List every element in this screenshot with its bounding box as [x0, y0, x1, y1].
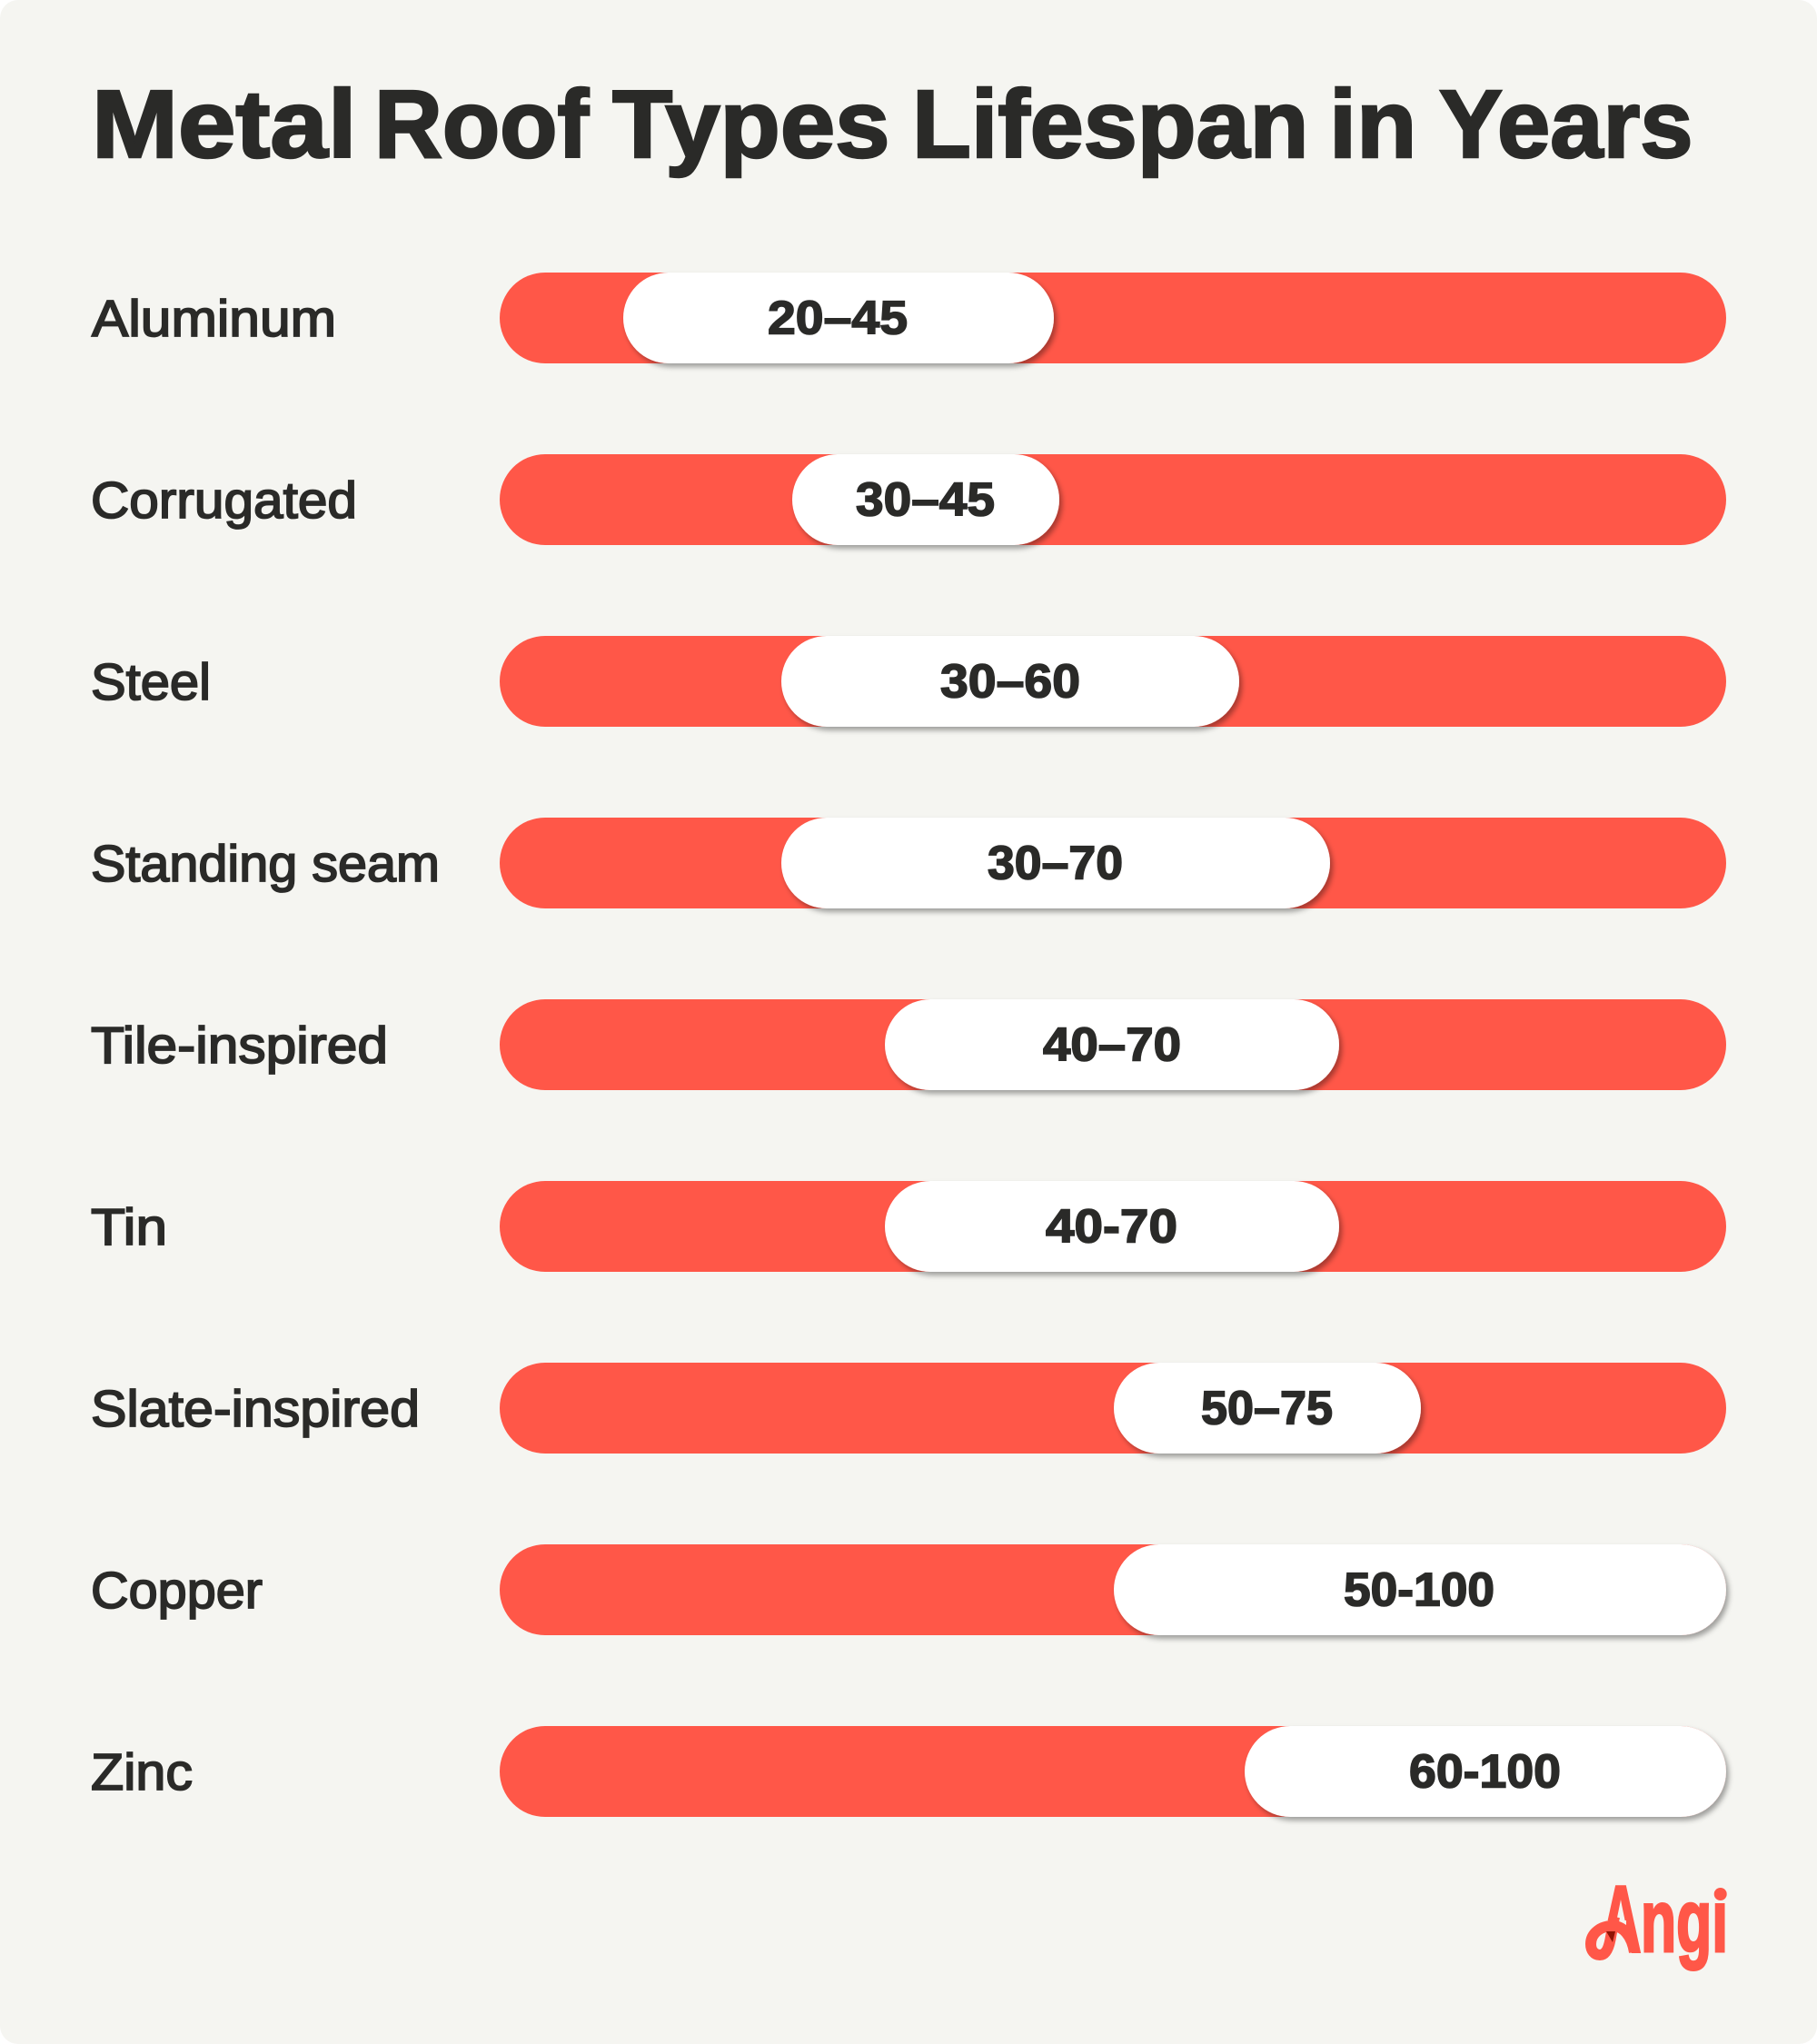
- track bar: Tile-inspired: [500, 999, 1726, 1090]
- track bar: Standing seam: [500, 818, 1726, 908]
- range pill: Corrugated: [792, 454, 1059, 545]
- range value: Zinc: 60-100: [1409, 1746, 1561, 1799]
- row: Standing seam: [91, 818, 1726, 908]
- label: Zinc: Zinc: [91, 1743, 193, 1801]
- track bar: Slate-inspired: [500, 1363, 1726, 1454]
- label: Tin: Tin: [91, 1198, 167, 1256]
- range pill: Zinc: [1245, 1726, 1726, 1817]
- title: [92, 71, 1693, 178]
- row: Copper: [91, 1544, 1726, 1635]
- track bar: Aluminum: [500, 273, 1726, 363]
- range value: Copper: 50-100: [1344, 1564, 1494, 1617]
- title: Roof: [374, 71, 590, 178]
- row: Slate-inspired: [91, 1363, 1726, 1454]
- range value: Aluminum: 20–45: [768, 293, 908, 345]
- track bar: Zinc: [500, 1726, 1726, 1817]
- range pill: Aluminum: [623, 273, 1054, 363]
- range value: Steel: 30–60: [940, 656, 1080, 709]
- label: Copper: Copper: [91, 1562, 263, 1620]
- range pill: Steel: [781, 636, 1239, 727]
- title: Metal: [92, 71, 356, 178]
- track bar: Corrugated: [500, 454, 1726, 545]
- track bar: Steel: [500, 636, 1726, 727]
- range value: Tin: 40-70: [1046, 1201, 1177, 1254]
- label: Steel: Steel: [91, 653, 211, 711]
- logo: Angi: A: [1600, 1866, 1642, 1973]
- row: Aluminum: [92, 273, 1726, 363]
- track bar: Copper: [500, 1544, 1726, 1635]
- label: Standing seam: Standing seam: [91, 835, 440, 893]
- row: Corrugated: [91, 454, 1726, 545]
- label: Tile-inspired: Tile-inspired: [91, 1017, 388, 1075]
- row: Steel: [91, 636, 1726, 727]
- range value: Slate-inspired: 50–75: [1201, 1383, 1333, 1435]
- title: in: [1329, 71, 1417, 178]
- row: Zinc: [91, 1726, 1726, 1817]
- title: Types: [612, 71, 890, 178]
- range pill: Tile-inspired: [885, 999, 1339, 1090]
- track bar: Tin: [500, 1181, 1726, 1272]
- label: Aluminum: Aluminum: [92, 290, 336, 348]
- row: Tile-inspired: [91, 999, 1726, 1090]
- label: Slate-inspired: Slate-inspired: [91, 1380, 420, 1438]
- range value: Corrugated: 30–45: [856, 474, 995, 527]
- range pill: Slate-inspired: [1114, 1363, 1421, 1454]
- title: Lifespan: [912, 71, 1308, 178]
- logo: Angi: ngi: [1641, 1871, 1728, 1970]
- range value: Standing seam: 30–70: [988, 838, 1123, 890]
- range pill: Standing seam: [781, 818, 1330, 908]
- range pill: Copper: [1114, 1544, 1726, 1635]
- row: Tin: [91, 1181, 1726, 1272]
- label: Corrugated: Corrugated: [91, 471, 357, 530]
- range pill: Tin: [885, 1181, 1339, 1272]
- range value: Tile-inspired: 40–70: [1043, 1019, 1181, 1072]
- logo: Angi: [1585, 1885, 1727, 1971]
- title: Years: [1439, 71, 1693, 178]
